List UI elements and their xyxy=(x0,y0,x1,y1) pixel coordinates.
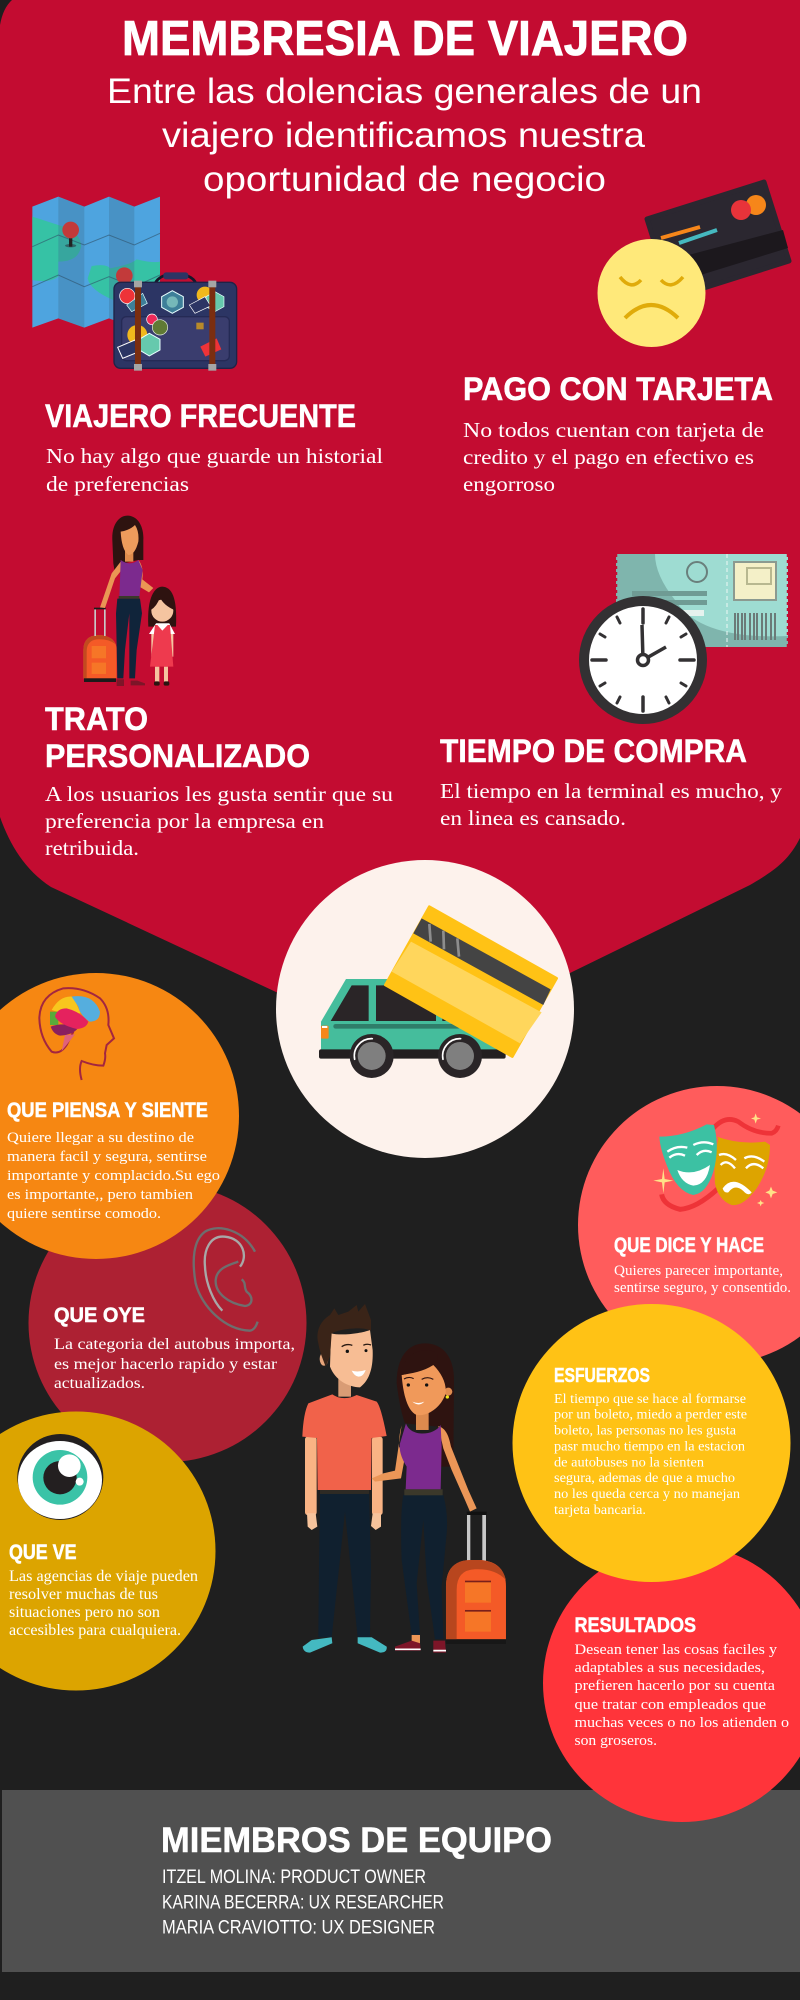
team list xyxy=(162,1867,444,1938)
icon: bus ticket and clock xyxy=(584,554,788,719)
panel: resultados xyxy=(543,1544,800,1822)
text: por un boleto, miedo a perder este xyxy=(554,1407,747,1422)
text: sentirse seguro, y consentido. xyxy=(614,1280,791,1296)
icon: head with brain xyxy=(39,988,114,1080)
icon: map and suitcase xyxy=(32,197,237,371)
text: Las agencias de viaje pueden xyxy=(9,1568,198,1585)
text: Desean tener las cosas faciles y xyxy=(574,1642,778,1658)
text: pago con tarjeta: engorroso xyxy=(463,472,555,496)
subtitle: viajero identificamos nuestra xyxy=(162,116,646,155)
figure: man xyxy=(302,1304,387,1653)
text: trato personalizado: preferencia por la empresa en xyxy=(45,809,325,833)
heading: trato personalizado xyxy=(45,701,310,774)
text: tiempo de compra xyxy=(440,779,783,830)
text xyxy=(7,1130,220,1222)
text: pago con tarjeta: No todos cuentan con tarjeta de xyxy=(463,418,764,442)
heading: trato personalizado: TRATO xyxy=(45,701,148,737)
panel: que ve xyxy=(0,1412,216,1690)
heading: RESULTADOS xyxy=(574,1614,696,1637)
text: trato personalizado: A los usuarios les gusta sentir que su xyxy=(45,782,394,806)
illustration: couple with suitcase xyxy=(302,1304,506,1653)
text: tarjeta bancaria. xyxy=(554,1502,646,1517)
icon: rolling suitcase xyxy=(446,1512,506,1644)
panel: que oye xyxy=(28,1184,306,1462)
text: Quiere llegar a su destino de xyxy=(7,1130,194,1146)
team list: MARIA CRAVIOTTO: UX DESIGNER xyxy=(162,1918,435,1938)
subtitle: oportunidad de negocio xyxy=(203,160,606,199)
text: Quieres parecer importante, xyxy=(614,1263,783,1279)
text: adaptables a sus necesidades, xyxy=(574,1660,765,1676)
text: trato personalizado: retribuida. xyxy=(45,836,139,860)
text: La categoria del autobus importa, xyxy=(54,1336,295,1353)
heading: QUE PIENSA Y SIENTE xyxy=(7,1099,208,1122)
text: resolver muchas de tus xyxy=(9,1586,158,1603)
text xyxy=(9,1568,198,1639)
heading: tiempo de compra: TIEMPO DE COMPRA xyxy=(440,733,747,769)
subtitle: Entre las dolencias generales de un xyxy=(107,72,702,111)
icon: mother and child with suitcase xyxy=(83,516,176,686)
subtitle xyxy=(107,72,702,199)
text: pago con tarjeta: credito y el pago en efectivo es xyxy=(463,445,754,469)
text: boleto, las personas no les gusta xyxy=(554,1422,736,1438)
figure: woman xyxy=(372,1343,477,1653)
text: muchas veces o no los atienden o xyxy=(574,1715,789,1731)
text: tiempo de compra: en linea es cansado. xyxy=(440,806,626,830)
text: es mejor hacerlo rapido y estar xyxy=(54,1356,278,1373)
heading: MIEMBROS DE EQUIPO xyxy=(161,1821,552,1860)
heading: QUE DICE Y HACE xyxy=(614,1234,764,1257)
text: importante y complacido.Su ego xyxy=(7,1168,220,1184)
panel: que piensa y siente xyxy=(0,973,239,1259)
text: quiere sentirse comodo. xyxy=(7,1206,161,1222)
panel: esfuerzos xyxy=(512,1304,790,1582)
text xyxy=(574,1642,789,1749)
icon: ear xyxy=(194,1228,258,1331)
text: manera facil y segura, sentirse xyxy=(7,1149,207,1165)
team list: ITZEL MOLINA: PRODUCT OWNER xyxy=(162,1867,426,1888)
text xyxy=(614,1263,791,1296)
text xyxy=(554,1391,747,1517)
text xyxy=(54,1336,295,1392)
team list: KARINA BECERRA: UX RESEARCHER xyxy=(162,1892,444,1914)
icon: credit card and sad face xyxy=(598,182,789,347)
text: El tiempo que se hace al formarse xyxy=(554,1391,746,1406)
text: segura, ademas de que a mucho xyxy=(554,1470,735,1485)
heading: QUE VE xyxy=(9,1541,76,1564)
text: accesibles para cualquiera. xyxy=(9,1622,181,1639)
text: que tratar con empleados que xyxy=(574,1697,766,1713)
heading: ESFUERZOS xyxy=(554,1365,650,1387)
icon: eye xyxy=(17,1434,103,1520)
heading: trato personalizado: PERSONALIZADO xyxy=(45,738,310,774)
text: viajero frecuente: de preferencias xyxy=(46,472,189,496)
text: pago con tarjeta xyxy=(463,418,764,496)
text: actualizados. xyxy=(54,1375,145,1392)
text: viajero frecuente xyxy=(46,444,383,496)
panel: que dice y hace xyxy=(578,1086,800,1364)
panel: miembros de equipo xyxy=(2,1790,800,1972)
text: prefieren hacerlo por su cuenta xyxy=(574,1678,775,1694)
heading: pago con tarjeta: PAGO CON TARJETA xyxy=(463,371,773,407)
text: viajero frecuente: No hay algo que guarde un historial xyxy=(46,444,383,468)
text: no les queda cerca y no manejan xyxy=(554,1486,740,1501)
text: tiempo de compra: El tiempo en la terminal es mucho, y xyxy=(440,779,783,803)
text: son groseros. xyxy=(574,1733,657,1749)
icon: bus with card in cream circle xyxy=(276,860,574,1158)
text: situaciones pero no son xyxy=(9,1604,160,1621)
text: es importante,, pero tambien xyxy=(7,1187,194,1203)
text: trato personalizado xyxy=(45,782,394,860)
text: pasr mucho tiempo en la estacion xyxy=(554,1438,745,1453)
panel: red header banner xyxy=(0,0,800,1056)
heading: viajero frecuente: VIAJERO FRECUENTE xyxy=(45,398,356,434)
text: de autobuses no la sienten xyxy=(554,1454,704,1470)
icon: theater masks xyxy=(653,1113,778,1209)
title: MEMBRESIA DE VIAJERO xyxy=(122,12,688,66)
heading: QUE OYE xyxy=(54,1304,145,1327)
